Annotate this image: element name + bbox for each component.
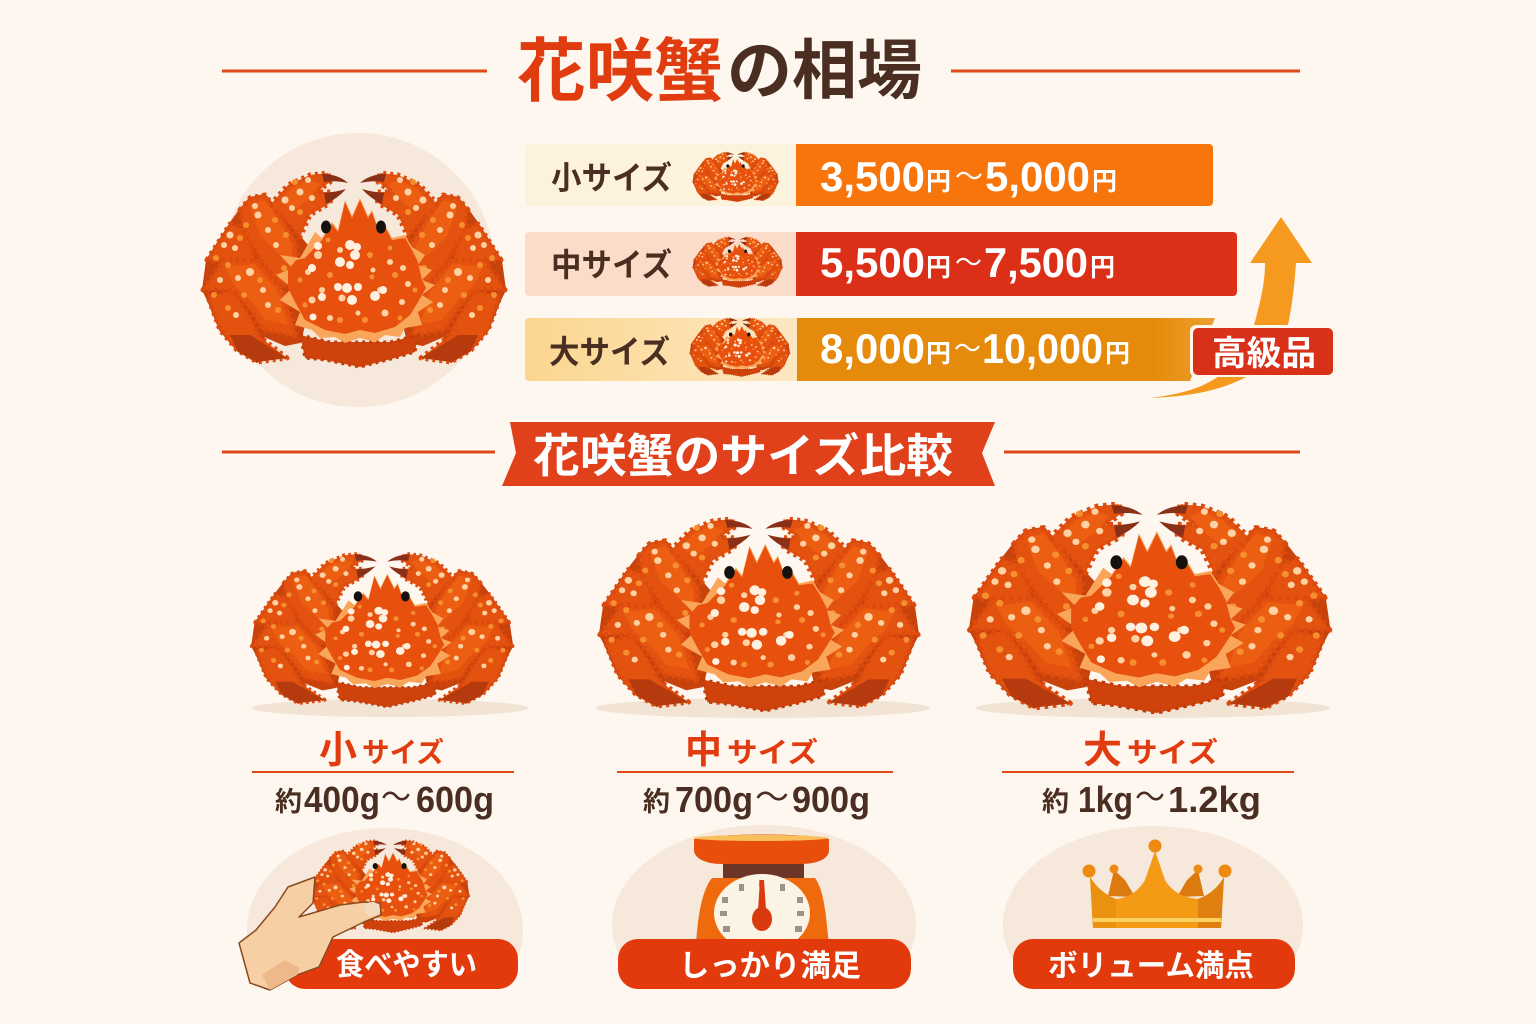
price row: small: 小サイズ	[551, 160, 672, 196]
title	[222, 33, 1300, 110]
price row: large: 円	[1105, 340, 1130, 368]
icon: kitchen scale	[694, 834, 829, 952]
column: large crab: 1.2kg	[1168, 779, 1261, 820]
icon: crown	[1082, 840, 1232, 928]
section heading ribbon: 花咲蟹のサイズ比較	[533, 430, 953, 482]
column: small crab: 600g	[416, 779, 494, 820]
column: small crab: 400g	[304, 779, 380, 820]
column: medium crab: 700g	[675, 779, 753, 820]
price row: medium: 円	[1090, 254, 1115, 282]
price row: small: 円	[1092, 168, 1117, 196]
column: small crab: ～	[381, 779, 411, 815]
column: large crab: 大	[1083, 730, 1122, 772]
feature: full volume	[990, 826, 1320, 1024]
hero crab in circle	[203, 133, 505, 407]
arrow: rising price	[1150, 217, 1312, 398]
column: medium crab: ～	[755, 779, 789, 815]
column: small crab: 約	[275, 787, 302, 817]
column: small crab: 小	[319, 730, 357, 772]
price row: large: 円	[926, 340, 951, 368]
feature: satisfying	[600, 825, 930, 1024]
price row: large	[525, 318, 1215, 381]
feature: easy to eat	[239, 828, 530, 1024]
price row: medium: 5,500	[820, 239, 925, 286]
column: medium crab: 約	[643, 787, 670, 817]
column: medium crab	[596, 519, 930, 820]
column: small crab: サイズ	[362, 736, 444, 768]
title: 花咲蟹	[517, 33, 723, 110]
column: medium crab: 中	[685, 730, 722, 772]
price row: medium: 中サイズ	[551, 247, 672, 283]
column: large crab: 1kg	[1078, 779, 1133, 820]
column: large crab: サイズ	[1127, 736, 1218, 768]
price row: small: 5,000	[985, 153, 1090, 200]
column: medium crab: サイズ	[727, 736, 818, 768]
feature: full volume: ボリューム満点	[1048, 950, 1254, 983]
price row: small: 3,500	[820, 153, 925, 200]
price row: large: 大サイズ	[549, 334, 670, 370]
column: small crab	[252, 554, 528, 820]
column: large crab: ～	[1135, 779, 1165, 815]
section heading ribbon	[222, 422, 1300, 486]
price row: medium: 円	[926, 254, 951, 282]
column: medium crab: 900g	[792, 779, 870, 820]
badge: premium: 高級品	[1212, 335, 1316, 373]
feature: easy to eat: 食べやすい	[336, 949, 477, 982]
badge: premium	[1190, 325, 1335, 377]
price row: large: ～	[954, 333, 981, 364]
feature: satisfying: しっかり満足	[679, 950, 861, 983]
price row: small	[525, 144, 1213, 206]
price row: medium	[525, 232, 1237, 296]
price row: medium: ～	[955, 247, 982, 278]
price row: large: 8,000	[820, 325, 925, 372]
price row: medium: 7,500	[984, 239, 1088, 286]
title: の相場	[727, 34, 922, 107]
column: large crab: 約	[1042, 787, 1069, 817]
column: large crab	[970, 504, 1330, 820]
price row: small: ～	[955, 161, 983, 192]
price row: large: 10,000	[982, 325, 1103, 372]
price row: small: 円	[926, 168, 951, 196]
